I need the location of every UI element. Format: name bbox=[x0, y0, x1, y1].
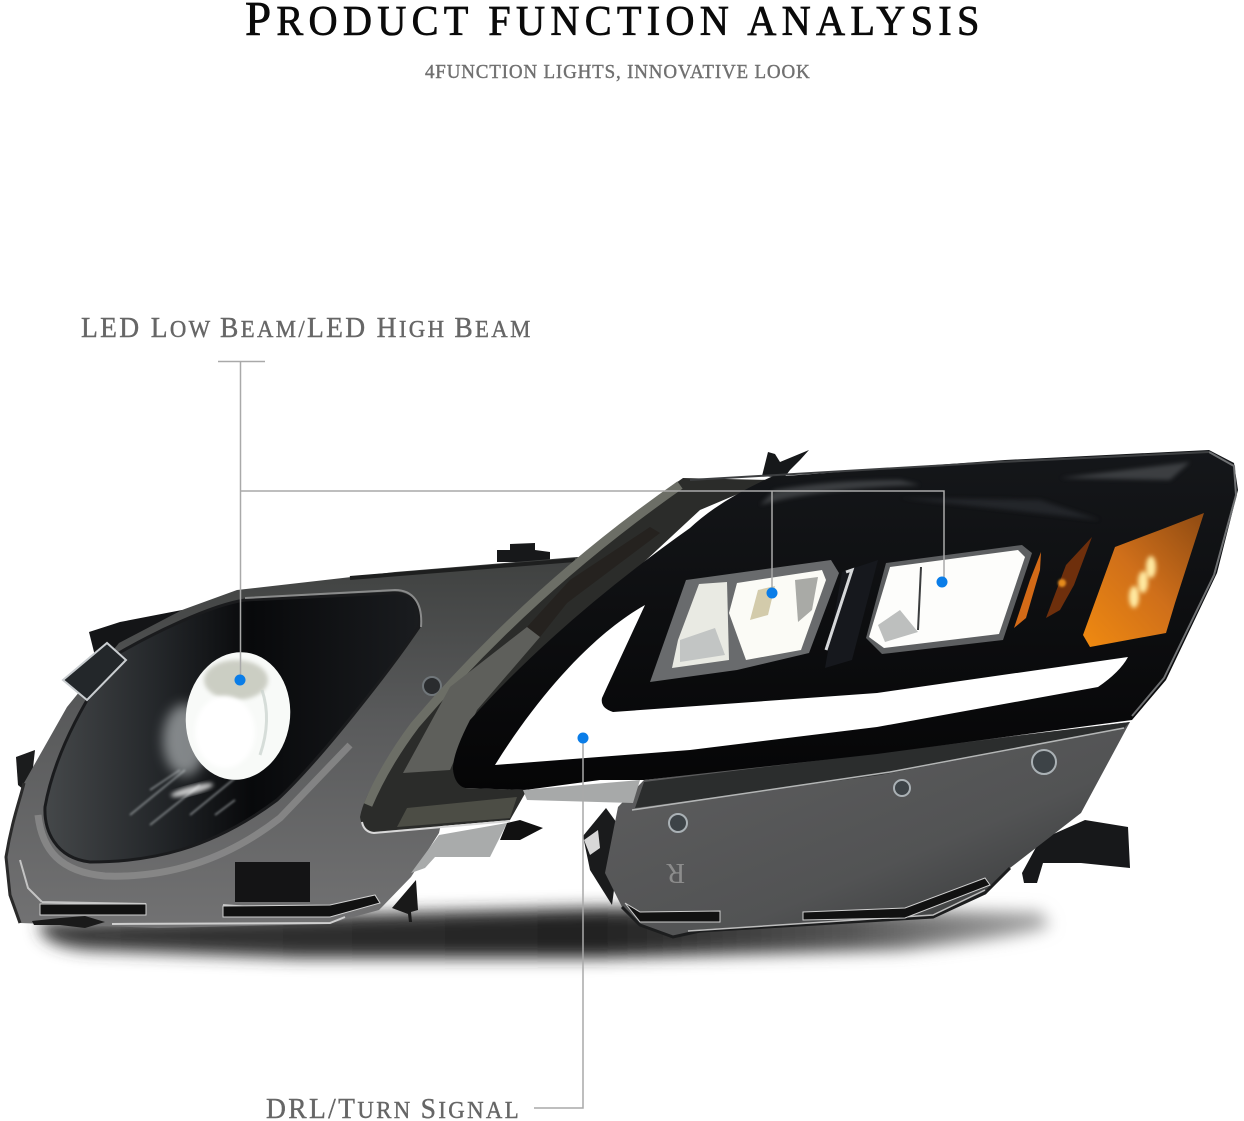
callout leader: DRL bbox=[534, 738, 583, 1108]
right housing smoky strip bbox=[635, 722, 1130, 808]
left adjuster screw bbox=[423, 677, 441, 695]
turn signal bright spots bbox=[1129, 556, 1156, 608]
right rear bracket bbox=[1022, 820, 1130, 883]
marker: DRL bbox=[578, 732, 588, 744]
lower housing bottom edge bbox=[622, 868, 1010, 937]
left projector bulb bbox=[178, 645, 298, 787]
lens rim highlight bbox=[245, 590, 421, 627]
left slot one bbox=[40, 904, 146, 915]
marker: high beam two bbox=[936, 576, 948, 588]
subtitle: 4FUNCTION LIGHTS, INNOVATIVE LOOK bbox=[425, 62, 810, 83]
band gray reflection bbox=[403, 627, 540, 773]
left lower clips bbox=[32, 916, 105, 928]
housing outer edge bbox=[6, 783, 24, 923]
embossed mark: R bbox=[666, 857, 685, 888]
right mounting screws bbox=[669, 750, 1056, 832]
left housing tabs bbox=[89, 610, 190, 668]
right lower housing bbox=[605, 722, 1130, 937]
headlight pair product illustration bbox=[6, 450, 1238, 958]
left side clip bbox=[16, 750, 35, 795]
marker: high beam one bbox=[766, 588, 778, 598]
amber turn signal bbox=[1083, 513, 1204, 647]
right top clip bbox=[762, 450, 809, 478]
band dark patch bbox=[527, 527, 660, 637]
left lamp module bbox=[650, 560, 839, 682]
lower pin bracket bbox=[392, 880, 418, 922]
band light stripe bbox=[368, 485, 680, 805]
left projector bulb glow bbox=[163, 704, 207, 776]
left housing body bbox=[6, 557, 600, 928]
left slot two bbox=[223, 895, 380, 917]
thin amber reflector bbox=[1046, 537, 1092, 618]
white DRL light bar bbox=[495, 605, 1128, 765]
band lower reflection bbox=[397, 797, 517, 827]
callout leader: LED beams bbox=[218, 362, 944, 680]
left hinge clip bbox=[63, 643, 126, 700]
band bottom-edge line bbox=[362, 821, 510, 833]
right connector bbox=[583, 808, 622, 905]
right bottom slots bbox=[625, 878, 990, 922]
left headlight bbox=[6, 543, 600, 928]
label: LED low beam / high beam: LED LOW BEAM/LED HIGH BEAM bbox=[81, 312, 531, 344]
trim outer highlight bbox=[1132, 452, 1236, 716]
orange side strip bbox=[1014, 552, 1041, 628]
marker: low beam bbox=[234, 674, 246, 686]
smoky outer band bbox=[360, 478, 771, 832]
mount knob bbox=[497, 543, 550, 562]
left housing light rim bbox=[38, 745, 350, 876]
silver bar under trim bbox=[523, 780, 640, 803]
right glossy black trim bbox=[453, 450, 1238, 790]
bracket black tab bbox=[500, 820, 543, 840]
right headlight bbox=[360, 450, 1238, 937]
left glare bbox=[170, 780, 214, 800]
silver lower bracket bbox=[411, 823, 507, 873]
left lens bbox=[45, 593, 420, 862]
right lamp module bbox=[866, 545, 1032, 654]
left lens streaks bbox=[130, 770, 245, 825]
pillar between lamps bbox=[825, 560, 878, 668]
ground shadow bbox=[40, 908, 1050, 958]
left recess bbox=[235, 862, 310, 902]
trim gloss highlights bbox=[760, 462, 1190, 520]
